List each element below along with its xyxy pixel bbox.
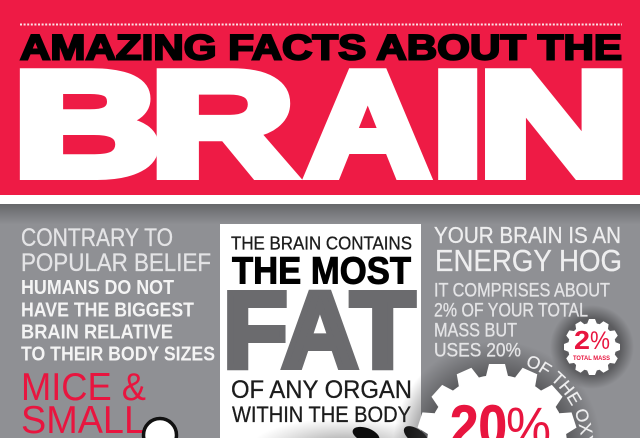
text: fat: FAT — [223, 269, 415, 390]
text: the most: THE MOST — [232, 250, 411, 292]
bold statement — [21, 277, 215, 366]
body text: 2% OF YOUR TOTAL — [434, 300, 588, 322]
big word: BRAIN: R — [150, 42, 294, 207]
icon: big gear 20% — [415, 364, 579, 438]
panel: brain fat — [220, 224, 440, 438]
body text: MASS BUT — [434, 320, 517, 342]
big word: BRAIN: N — [478, 42, 630, 207]
panel: mice fact — [21, 224, 215, 438]
white separator band — [0, 195, 640, 204]
big word: BRAIN: I — [432, 42, 483, 207]
icon: small gear 2%: % — [590, 327, 610, 355]
heading — [434, 222, 622, 278]
icon: small gear 2% — [564, 319, 620, 375]
body text: USES 20% — [434, 340, 521, 362]
title line: AMAZING FACTS ABOUT THE — [20, 28, 622, 68]
text: the brain contains: THE BRAIN CONTAINS — [231, 234, 412, 254]
intro text: CONTRARY TO — [21, 224, 173, 252]
small gear value: 2 — [574, 325, 590, 355]
intro text: POPULAR BELIEF — [21, 249, 211, 277]
big word: BRAIN — [13, 41, 630, 207]
icon: black marks — [350, 422, 431, 438]
text: of any organ: OF ANY ORGAN — [231, 376, 412, 404]
small gear shadow — [550, 305, 634, 389]
grey background — [0, 204, 640, 438]
icon: mouse ear circle — [144, 418, 176, 438]
bold statement: BRAIN RELATIVE — [21, 322, 173, 344]
big gear shadow — [393, 341, 601, 438]
body text — [434, 280, 610, 362]
red heading: MICE & — [21, 366, 146, 409]
bold statement: TO THEIR BODY SIZES — [21, 344, 215, 366]
bold statement: HAVE THE BIGGEST — [21, 300, 194, 322]
bottom shading — [250, 418, 440, 438]
big word: BRAIN: B — [13, 41, 161, 206]
heading: ENERGY HOG — [435, 243, 622, 278]
bold statement: HUMANS DO NOT — [21, 277, 174, 299]
intro text — [21, 224, 211, 277]
icon: small gear 2%: TOTAL MASS — [573, 355, 610, 362]
header banner — [0, 0, 640, 207]
dotted rule — [20, 24, 622, 26]
heading: YOUR BRAIN IS AN — [434, 222, 621, 248]
body text: IT COMPRISES ABOUT — [434, 280, 610, 302]
text: within the body: WITHIN THE BODY — [232, 402, 411, 427]
big word: BRAIN: A — [306, 41, 429, 206]
red heading — [21, 366, 146, 438]
